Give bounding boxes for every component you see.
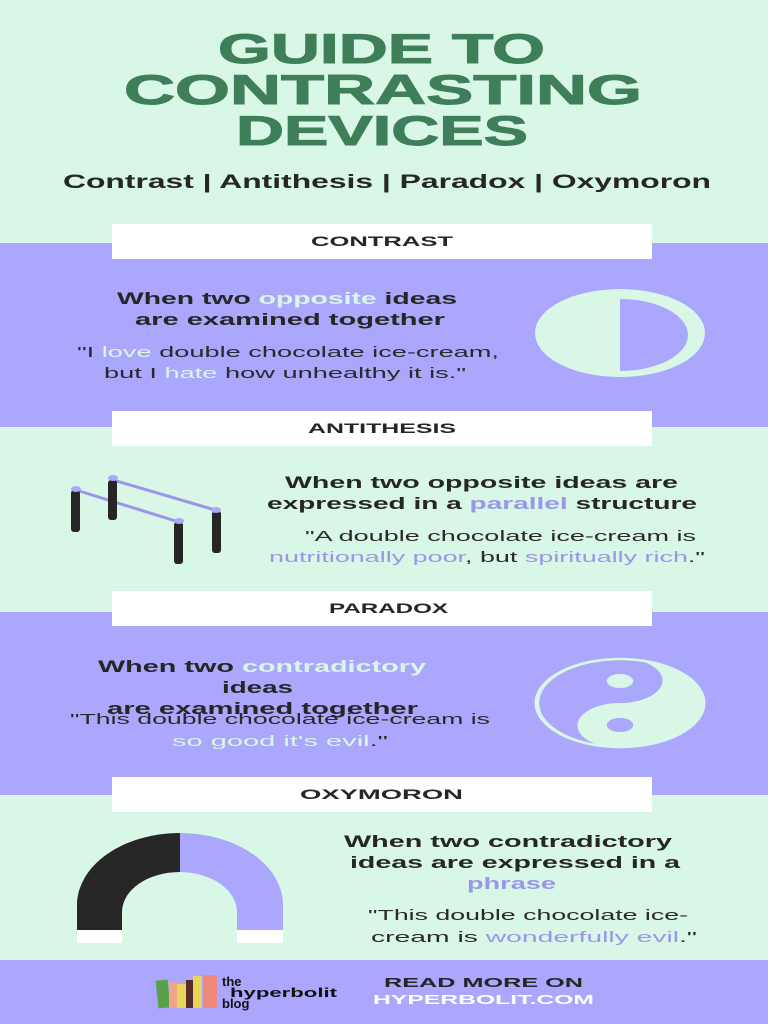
oxymoron quote: cream is wonderfully evil ." xyxy=(371,929,697,946)
antithesis quote xyxy=(269,528,705,566)
read more: HYPERBOLIT.COM xyxy=(373,992,594,1007)
paradox quote: "This double chocolate ice-cream is xyxy=(70,711,490,728)
title: CONTRASTING xyxy=(124,66,642,113)
contrast heading: When two opposite ideas xyxy=(117,289,457,308)
oxymoron quote xyxy=(368,907,697,946)
icon: books xyxy=(156,975,217,1009)
paradox heading: are examined together xyxy=(107,699,419,718)
title: GUIDE TO xyxy=(218,25,545,72)
read more xyxy=(373,975,594,1007)
panel: oxymoron xyxy=(77,777,697,946)
blog name: the xyxy=(222,974,242,989)
label: paradox xyxy=(112,591,652,626)
read more: READ MORE ON xyxy=(384,975,583,990)
antithesis quote: nutritionally poor , but spiritually rich ." xyxy=(269,549,705,566)
paradox quote: so good it's evil ." xyxy=(172,733,388,750)
contrast heading xyxy=(117,289,457,329)
label: contrast: CONTRAST xyxy=(311,233,454,249)
panel: paradox xyxy=(0,591,768,795)
icon: magnet xyxy=(77,833,283,943)
oxymoron quote: "This double chocolate ice- xyxy=(368,907,688,924)
paradox heading: ideas xyxy=(222,678,293,697)
contrast quote xyxy=(77,344,499,382)
label: oxymoron: OXYMORON xyxy=(300,786,463,802)
contrast heading: are examined together xyxy=(135,310,446,329)
antithesis heading xyxy=(267,473,697,513)
oxymoron heading: phrase xyxy=(467,874,556,893)
icon: parallel bars xyxy=(71,475,221,564)
title: DEVICES xyxy=(236,107,528,154)
label: antithesis xyxy=(112,411,652,446)
contrast quote: "I love double chocolate ice-cream, xyxy=(77,344,499,361)
blog name: blog xyxy=(222,996,249,1011)
label: oxymoron xyxy=(112,777,652,812)
blog name xyxy=(222,974,338,1011)
oxymoron heading: When two contradictory xyxy=(344,832,673,851)
paradox quote xyxy=(70,711,490,750)
icon: yin yang xyxy=(537,658,705,748)
oxymoron heading xyxy=(344,832,681,893)
title xyxy=(124,25,642,154)
panel: contrast xyxy=(0,224,768,427)
panel: antithesis xyxy=(71,411,705,566)
footer xyxy=(0,960,768,1024)
contrast quote: but I hate how unhealthy it is." xyxy=(104,365,466,382)
antithesis heading: expressed in a parallel structure xyxy=(267,494,697,513)
paradox heading: When two contradictory xyxy=(98,657,427,676)
label: antithesis: ANTITHESIS xyxy=(308,420,456,436)
label: contrast xyxy=(112,224,652,259)
oxymoron heading: ideas are expressed in a xyxy=(350,853,681,872)
subtitle: Contrast | Antithesis | Paradox | Oxymoron xyxy=(63,172,711,193)
label: paradox: PARADOX xyxy=(329,600,449,616)
antithesis heading: When two opposite ideas are xyxy=(285,473,678,492)
paradox heading xyxy=(98,657,427,718)
antithesis quote: "A double chocolate ice-cream is xyxy=(305,528,696,545)
icon: half ellipse xyxy=(535,289,705,377)
blog name: hyperbolit xyxy=(230,985,338,1000)
